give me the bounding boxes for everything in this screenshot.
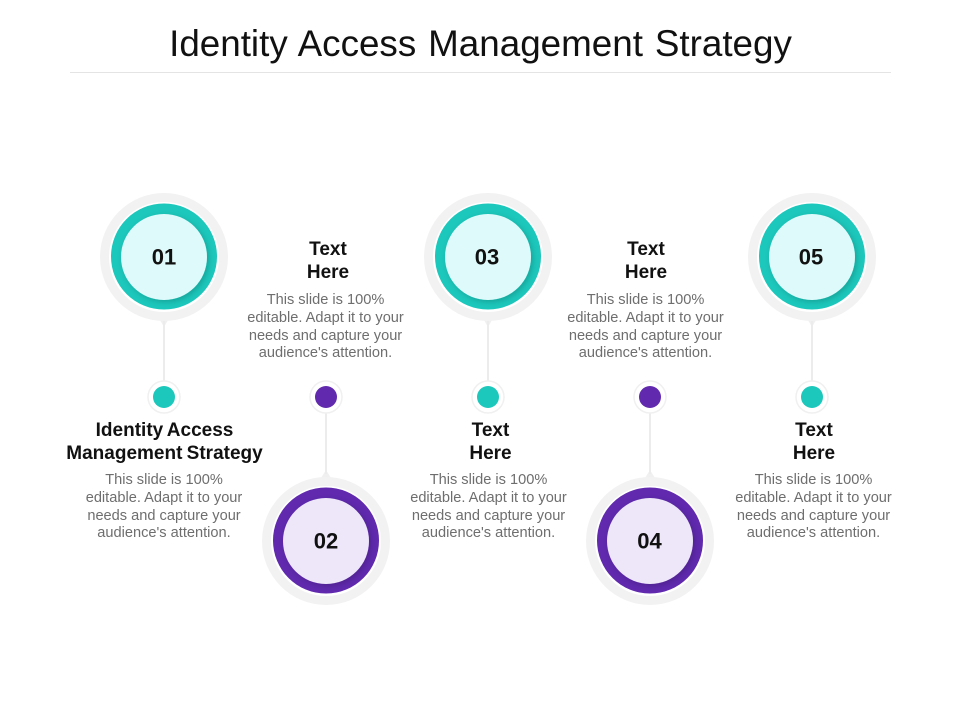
heading: step 1: [66, 420, 263, 464]
node 04: 04: [637, 528, 662, 554]
text: step 2: This slide is 100%: [267, 292, 384, 308]
text: step 5: [735, 472, 892, 541]
text: step 1: This slide is 100%: [105, 472, 223, 488]
text: step 3: editable. Adapt it to your: [410, 490, 567, 506]
text: step 3: audience's attention.: [422, 525, 555, 541]
heading: step 2: Text: [309, 239, 347, 260]
heading: step 1: Management Strategy: [66, 443, 263, 464]
text: step 2: needs and capture your: [249, 328, 402, 344]
heading: step 5: [793, 420, 835, 464]
text: step 1: editable. Adapt it to your: [86, 490, 242, 506]
heading: step 4: Here: [625, 262, 667, 283]
heading: step 5: Text: [795, 420, 833, 441]
text: step 1: needs and capture your: [87, 508, 241, 524]
heading: step 3: Text: [472, 420, 509, 441]
node 01: [100, 193, 228, 413]
heading: step 2: Here: [307, 262, 349, 283]
node 01: 01: [152, 244, 176, 270]
node 05: 05: [799, 244, 823, 270]
text: step 3: needs and capture your: [412, 508, 565, 524]
text: step 4: This slide is 100%: [587, 292, 704, 308]
text: step 3: This slide is 100%: [430, 472, 547, 488]
text: step 4: editable. Adapt it to your: [567, 310, 724, 326]
text: step 4: [567, 292, 724, 361]
heading: step 1: Identity Access: [96, 420, 233, 441]
title: Identity Access Management Strategy: [169, 23, 792, 64]
node 03: 03: [475, 244, 499, 270]
text: step 2: editable. Adapt it to your: [247, 310, 404, 326]
node 02: [262, 381, 390, 605]
heading: step 4: Text: [627, 239, 665, 260]
text: step 5: needs and capture your: [737, 508, 890, 524]
heading: step 2: [307, 239, 349, 283]
node 05: [748, 193, 876, 413]
text: step 5: audience's attention.: [747, 525, 880, 541]
text: step 2: [247, 292, 404, 361]
text: step 5: editable. Adapt it to your: [735, 490, 892, 506]
text: step 5: This slide is 100%: [755, 472, 872, 488]
node 03: [424, 193, 552, 413]
node 02: 02: [314, 528, 338, 554]
title divider: [70, 72, 891, 73]
heading: step 5: Here: [793, 443, 835, 464]
text: step 2: audience's attention.: [259, 345, 392, 361]
heading: step 3: Here: [469, 443, 512, 464]
text: step 4: audience's attention.: [579, 345, 712, 361]
heading: step 3: [469, 420, 512, 464]
text: step 1: audience's attention.: [97, 525, 231, 541]
text: step 3: [410, 472, 567, 541]
text: step 4: needs and capture your: [569, 328, 722, 344]
text: step 1: [86, 472, 242, 541]
node 04: [586, 381, 714, 605]
heading: step 4: [625, 239, 667, 283]
